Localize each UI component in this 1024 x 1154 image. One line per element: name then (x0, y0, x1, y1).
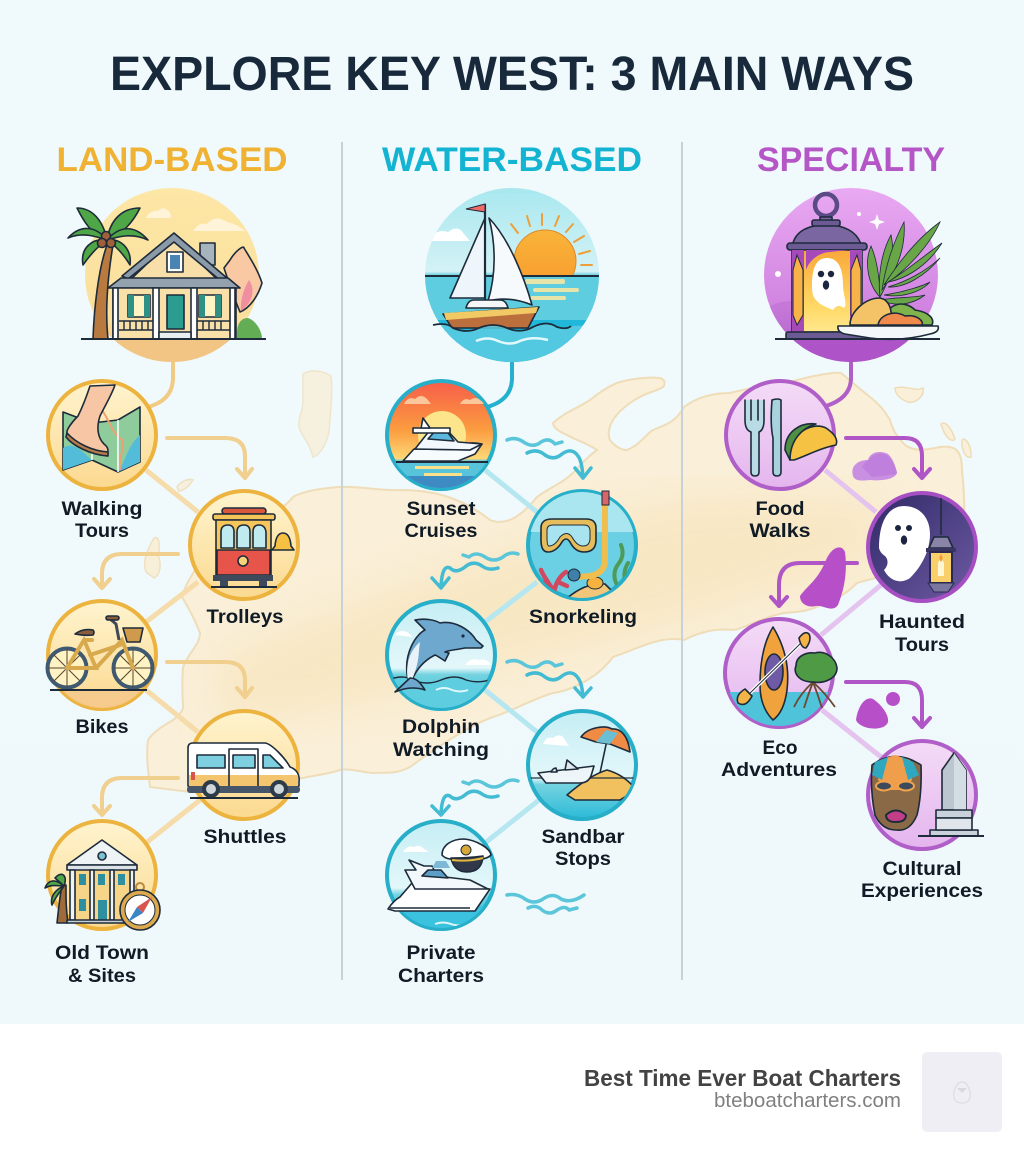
node: trolleys (190, 491, 298, 628)
node: cultural experiences (861, 741, 984, 902)
footer bar (0, 1024, 1024, 1154)
label: Private (406, 943, 476, 964)
arrows: wavy water flow (432, 439, 591, 913)
label: Cruises (404, 521, 478, 542)
node: dolphin watching (387, 601, 495, 761)
node: sunset cruises (387, 381, 498, 542)
label (861, 859, 983, 902)
label: Food (756, 499, 804, 520)
label: Sunset (406, 499, 476, 520)
label: Old Town (55, 943, 149, 964)
icon: conch house (68, 188, 266, 369)
panel: land-based (45, 141, 300, 987)
label: Sandbar (542, 827, 625, 848)
icon: sailboat and sun (425, 188, 599, 366)
label: Bikes (76, 717, 128, 738)
background map: Key West sand island (145, 371, 971, 792)
decoration: purple clouds and blobs (800, 452, 900, 729)
label: Walking (62, 499, 142, 520)
label (750, 499, 810, 542)
icon: lantern with ghost and food plate (764, 188, 942, 369)
label: Charters (398, 966, 484, 987)
node: private charters (387, 821, 495, 987)
label: Watching (393, 740, 489, 761)
label: Haunted (879, 612, 965, 633)
node: shuttles (187, 711, 300, 848)
arrows: specialty flow (771, 438, 930, 727)
node: old town and sites (45, 821, 160, 987)
label: Snorkeling (529, 607, 637, 628)
label (62, 499, 142, 542)
node: snorkeling (528, 491, 637, 628)
column divider left (341, 142, 343, 980)
label (721, 738, 837, 781)
node: sandbar stops (528, 711, 636, 870)
label: & Sites (68, 966, 136, 987)
heading: water-based: WATER-BASED (382, 141, 642, 179)
node: food walks (726, 381, 837, 542)
label: Adventures (721, 760, 837, 781)
footer logo placeholder (922, 1052, 1002, 1132)
label: Tours (895, 635, 949, 656)
label: Dolphin (402, 717, 480, 738)
label (398, 943, 484, 987)
label: Experiences (861, 881, 983, 902)
connectors: land path (146, 360, 200, 843)
connectors: specialty path (821, 360, 881, 757)
label: Stops (555, 849, 611, 870)
label (55, 943, 149, 987)
node: walking tours (48, 381, 156, 542)
label (879, 612, 965, 656)
label (404, 499, 478, 542)
label (393, 717, 489, 761)
node: haunted tours (868, 493, 976, 656)
title: EXPLORE KEY WEST: 3 MAIN WAYS (110, 48, 914, 101)
panel: specialty (721, 141, 984, 902)
column divider right (681, 142, 683, 980)
node: bikes (48, 601, 156, 738)
heading: land-based: LAND-BASED (56, 141, 288, 179)
label: Tours (75, 521, 129, 542)
label (542, 827, 625, 870)
label: Trolleys (206, 607, 284, 628)
label: Shuttles (204, 827, 286, 848)
connectors: water path (485, 360, 539, 843)
panel: water-based (382, 141, 642, 987)
label: Cultural (882, 859, 962, 880)
label: Eco (762, 738, 798, 759)
arrows: land flow (94, 438, 252, 815)
heading: specialty: SPECIALTY (757, 141, 945, 179)
footer brand name: Best Time Ever Boat Charters (584, 1065, 901, 1091)
node: eco adventures (721, 619, 837, 781)
footer url: bteboatcharters.com (714, 1090, 901, 1112)
label: Walks (750, 521, 810, 542)
